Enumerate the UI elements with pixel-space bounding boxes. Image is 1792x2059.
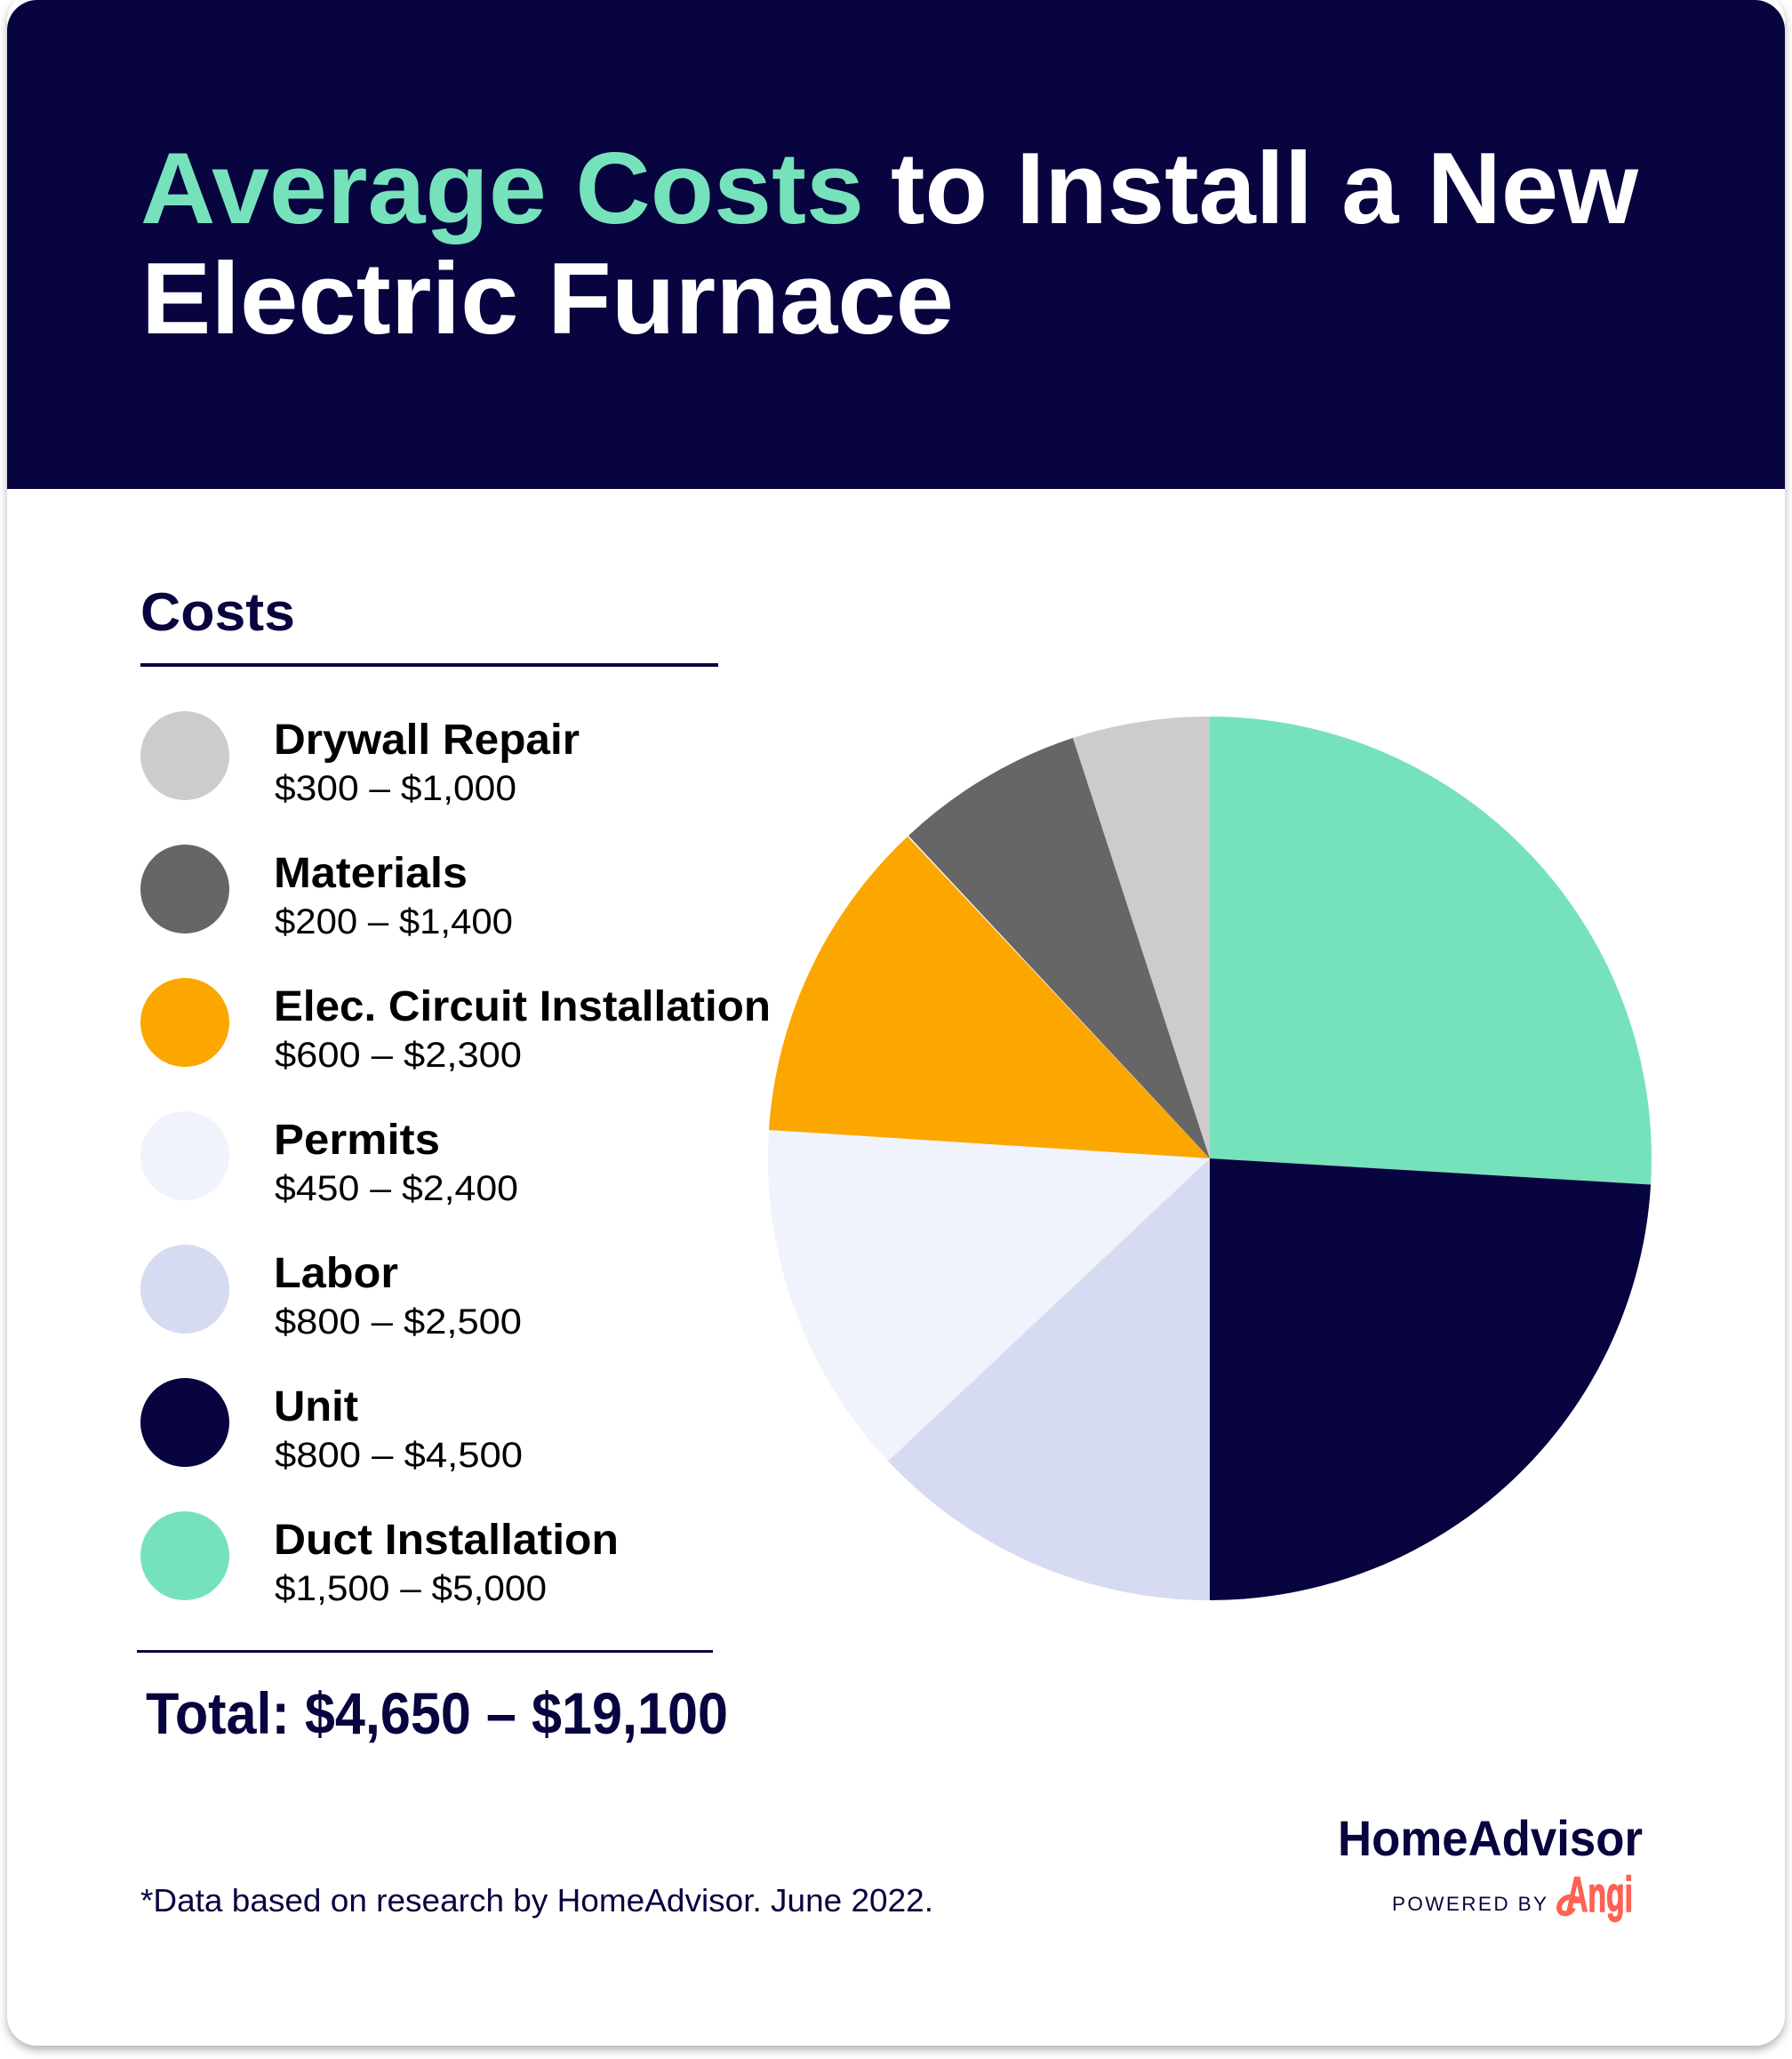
title: to Install a New	[891, 132, 1638, 245]
legend heading: Costs	[140, 582, 295, 642]
slice: duct installation	[1210, 717, 1652, 1184]
pie chart	[768, 717, 1652, 1600]
title: Electric Furnace	[141, 243, 954, 356]
legend item: drywall repair: $300 – $1,000	[275, 769, 516, 808]
title	[140, 132, 1638, 356]
slice: materials	[908, 738, 1210, 1158]
legend item: unit	[140, 1378, 523, 1475]
logo: HomeAdvisor powered by Angi	[1338, 1810, 1643, 1922]
legend item: duct installation: $1,500 – $5,000	[275, 1569, 547, 1608]
header panel	[7, 0, 1785, 489]
legend item: electric circuit installation: $600 – $2,300	[275, 1036, 522, 1075]
legend item: labor	[140, 1245, 522, 1342]
slice: unit	[1210, 1158, 1651, 1600]
legend item: permits: $450 – $2,400	[275, 1169, 518, 1208]
slice: labor	[888, 1158, 1210, 1600]
legend item: labor: Labor	[274, 1250, 398, 1297]
legend item: materials: $200 – $1,400	[275, 902, 513, 941]
total: Total: $4,650 – $19,100	[146, 1680, 728, 1746]
legend item: drywall repair: Drywall Repair	[274, 717, 580, 764]
legend item: duct installation	[140, 1511, 619, 1608]
slice: drywall repair	[1073, 717, 1210, 1158]
legend item: permits	[140, 1111, 518, 1208]
legend item: labor: $800 – $2,500	[275, 1302, 522, 1342]
slice: permits	[768, 1130, 1210, 1462]
legend item: unit: Unit	[274, 1383, 358, 1430]
legend item: duct installation: Duct Installation	[274, 1517, 619, 1564]
legend	[140, 711, 771, 1608]
logo: HomeAdvisor powered by Angi: POWERED BY	[1392, 1893, 1547, 1915]
legend item: materials	[140, 845, 513, 941]
footnote: *Data based on research by HomeAdvisor. June 2022.	[140, 1882, 933, 1919]
legend item: electric circuit installation	[140, 978, 771, 1075]
legend item: permits: Permits	[274, 1117, 440, 1164]
legend item: drywall repair	[140, 711, 580, 808]
legend item: materials: Materials	[274, 850, 468, 897]
legend item: electric circuit installation: Elec. Circuit Installation	[274, 983, 771, 1030]
logo: HomeAdvisor powered by Angi: HomeAdvisor	[1338, 1810, 1643, 1866]
title: Average Costs	[140, 132, 864, 245]
legend item: unit: $800 – $4,500	[275, 1436, 523, 1475]
logo: HomeAdvisor powered by Angi: Angi	[1566, 1866, 1633, 1922]
slice: electric circuit	[769, 837, 1210, 1158]
